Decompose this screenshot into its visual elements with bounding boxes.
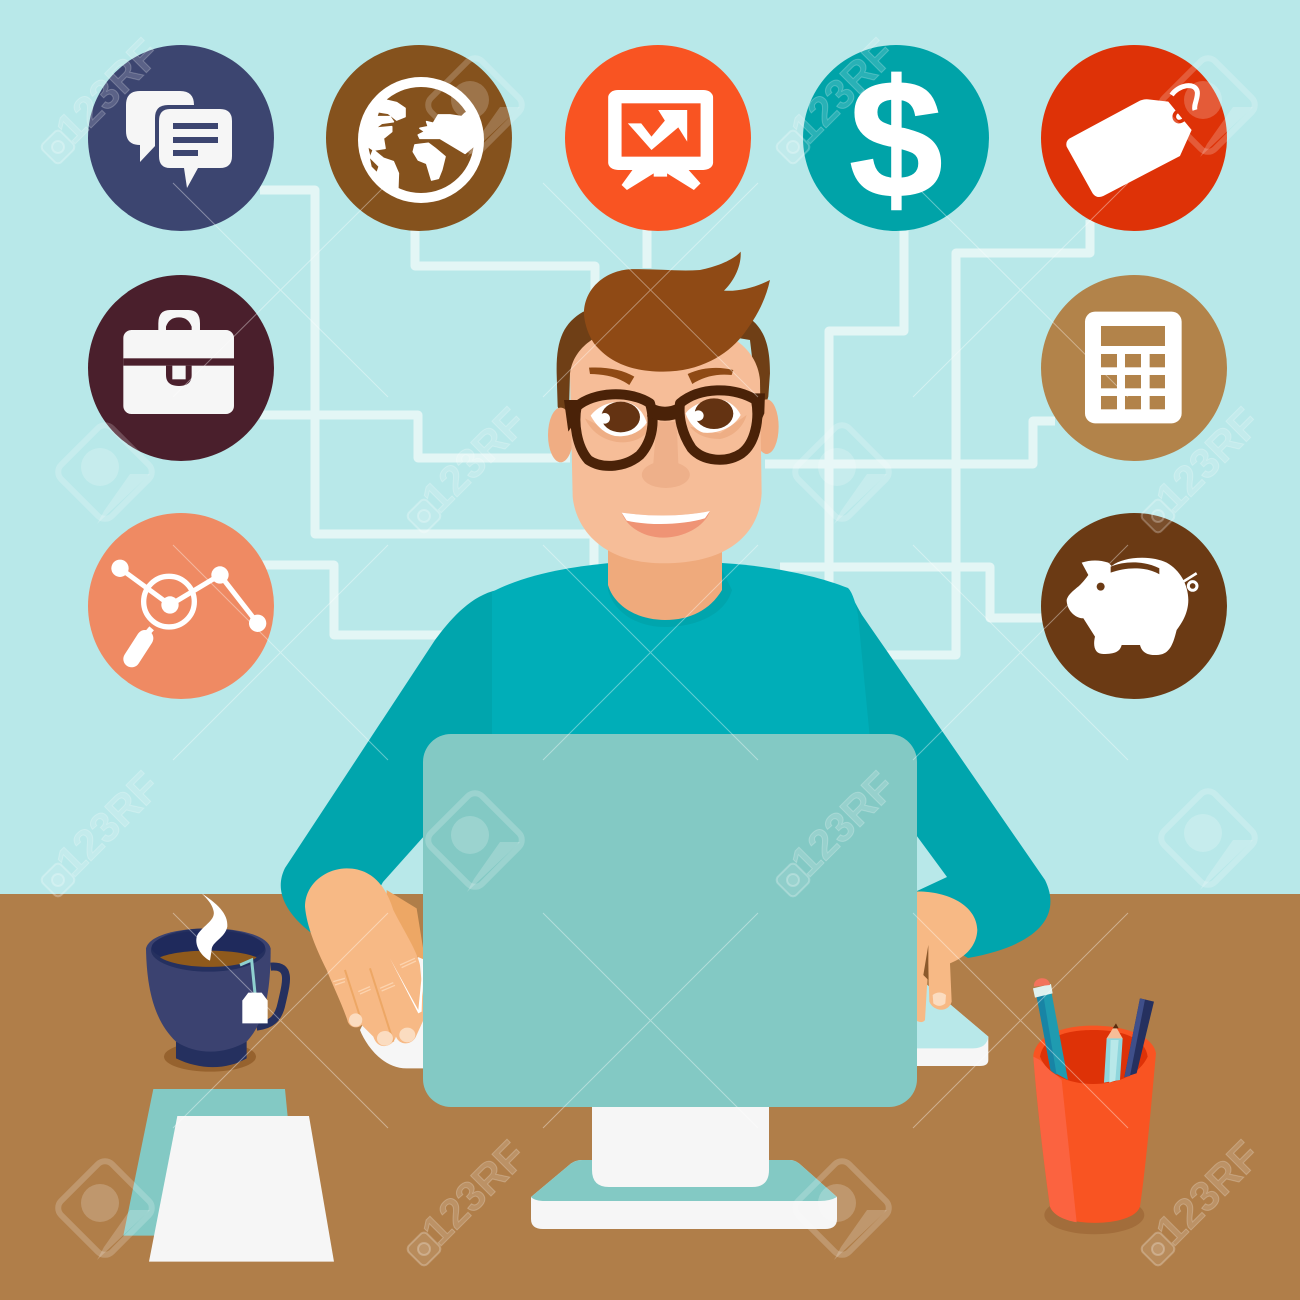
papers <box>123 1089 334 1262</box>
neckline shadow <box>608 570 732 627</box>
watermark small camera marks <box>40 129 1176 1267</box>
watermark text: 123RF <box>47 763 169 885</box>
watermark text: 123RF <box>782 30 904 152</box>
right sleeve <box>846 590 1050 958</box>
icon: piggy bank <box>1041 513 1227 699</box>
monitor stand <box>592 1100 769 1187</box>
icon: chart with magnifier <box>88 513 274 699</box>
neck <box>608 550 722 620</box>
ears <box>548 408 573 462</box>
icon: calculator <box>1041 275 1227 461</box>
pencil cup <box>1033 978 1156 1234</box>
right hand on mouse <box>913 892 988 1066</box>
connector lines <box>260 190 1090 655</box>
person <box>281 252 1050 958</box>
mouth <box>622 511 710 538</box>
teabag <box>240 960 255 993</box>
back hair <box>557 312 770 432</box>
watermark lines <box>173 183 1128 1128</box>
watermark text: 123RF <box>782 763 904 885</box>
icon: globe <box>326 45 512 231</box>
brows <box>589 367 634 385</box>
head <box>548 252 779 563</box>
left hand on mouse <box>305 868 427 1068</box>
steam <box>196 893 227 961</box>
torso <box>492 563 872 760</box>
icon: dollar <box>803 45 989 233</box>
icon: price tag <box>1041 45 1227 231</box>
face <box>570 323 762 563</box>
watermark text: 123RF <box>47 30 169 152</box>
right eye <box>690 415 747 439</box>
left sleeve <box>281 590 497 950</box>
watermark text: 123RF <box>413 399 535 521</box>
pencil with eraser <box>1037 993 1068 1080</box>
watermark text: 123RF <box>413 1132 535 1254</box>
monitor screen <box>423 734 917 1107</box>
monitor <box>423 734 917 1229</box>
icon: presentation board <box>565 45 751 231</box>
icon: briefcase <box>88 275 274 461</box>
short pencil <box>1104 1028 1123 1083</box>
coffee cup <box>146 893 286 1072</box>
nose <box>642 422 690 488</box>
watermark text: 123RF <box>1147 399 1269 521</box>
glasses <box>575 390 757 466</box>
left eye <box>585 418 652 442</box>
icon: dollar: $ <box>849 45 943 233</box>
icon: chat bubbles <box>88 45 274 231</box>
watermark text: 123RF <box>1147 1132 1269 1254</box>
monitor base <box>531 1160 837 1229</box>
pen <box>1124 998 1154 1077</box>
top hair <box>584 252 770 372</box>
